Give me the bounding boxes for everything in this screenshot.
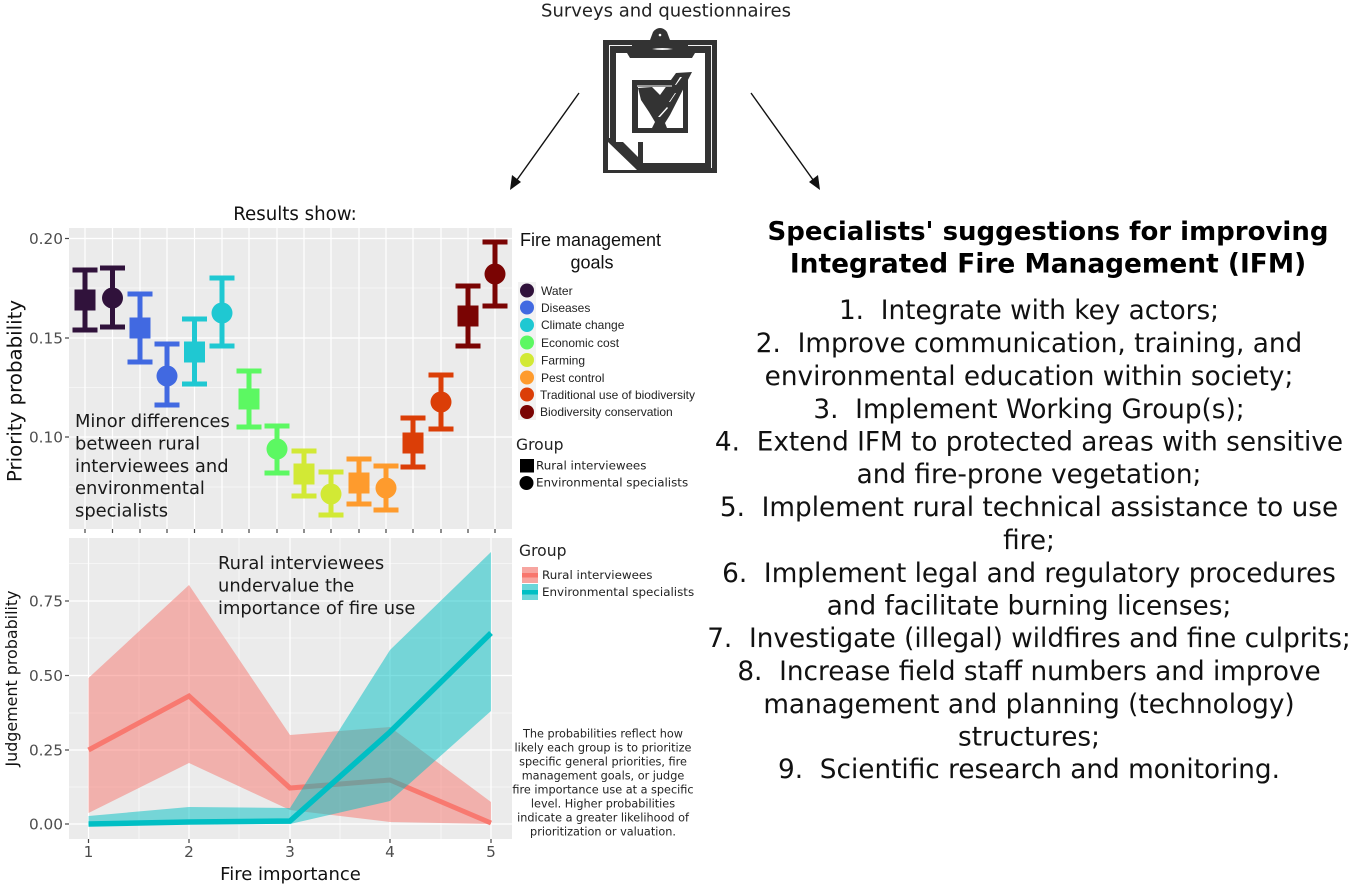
annotation: minor differences: interviewees and: [75, 456, 229, 477]
panel: judgement probability chart: 0.00: [29, 816, 63, 834]
list: nine suggestions: 2. Improve communication, training, and: [756, 329, 1302, 359]
panel: priority probability chart: 0.10: [29, 428, 63, 446]
panel: judgement probability chart: Judgement probability: [2, 590, 21, 768]
text block: probability note: The probabilities reflect how: [522, 728, 683, 740]
list: nine suggestions: 5. Implement rural technical assistance to use: [720, 493, 1338, 523]
annotation: rural interviewees undervalue: importance of fire use: [218, 598, 415, 619]
legend: fire management goals: [518, 230, 695, 420]
series: rural interviewees ribbon and line: [88, 585, 491, 824]
list: nine suggestions: 1. Integrate with key actors;: [839, 296, 1219, 326]
data: water: [72, 268, 125, 330]
annotation: minor differences: environmental: [75, 478, 205, 499]
text block: probability note: level. Higher probabilities: [531, 798, 675, 810]
list: nine suggestions: and fire-prone vegetation;: [857, 460, 1201, 490]
legend: fire management goals: Water: [541, 284, 573, 298]
text block: probability note: management goals, or judge: [522, 770, 684, 782]
heading: specialists' suggestions: Integrated Fire Management (IFM): [790, 248, 1306, 280]
legend: fire management goals: Biodiversity conservation: [540, 405, 673, 419]
legend: fire management goals: Diseases: [541, 301, 590, 315]
panel: priority probability chart: 0.15: [29, 330, 63, 348]
panel: judgement probability chart: 0.75: [29, 592, 63, 610]
legend: group shapes: Environmental specialists: [536, 476, 688, 490]
heading: results show: Results show:: [233, 204, 357, 225]
annotation: minor differences: specialists: [75, 500, 168, 522]
data: diseases: [128, 294, 180, 405]
panel: judgement probability chart: 4: [385, 843, 395, 861]
heading: specialists' suggestions: [768, 217, 1328, 280]
list: nine suggestions: fire;: [1003, 526, 1055, 556]
panel: priority probability chart: Priority probability: [4, 300, 26, 482]
list: nine suggestions: 3. Implement Working Group(s);: [813, 395, 1245, 425]
panel: judgement probability chart: 5: [486, 843, 496, 861]
legend: fire management goals: Economic cost: [541, 336, 620, 350]
arrow: to results: [510, 93, 579, 190]
legend: group ribbons: Rural interviewees: [542, 568, 652, 582]
legend: fire management goals: goals: [570, 252, 614, 272]
list: nine suggestions: management and planning (technology): [763, 690, 1295, 720]
data: farming: [292, 451, 344, 515]
legend: group shapes: Group: [516, 436, 564, 454]
panel: judgement probability chart: Fire importance: [220, 864, 361, 885]
legend: fire management goals: Fire management: [520, 230, 661, 250]
arrow: to suggestions: [751, 93, 820, 190]
list: nine suggestions: 8. Increase field staff numbers and improve: [737, 657, 1321, 687]
legend: fire management goals: Traditional use of biodiversity: [540, 388, 695, 402]
panel: judgement probability chart: 0.25: [29, 742, 63, 760]
data: climate change: [182, 278, 234, 384]
text block: probability note: [512, 728, 694, 838]
data: traditional use of biodiversity: [400, 375, 454, 467]
data: pest control: [346, 459, 398, 510]
list: nine suggestions: 9. Scientific research and monitoring.: [778, 755, 1280, 785]
legend: group shapes: Rural interviewees: [536, 458, 646, 472]
list: nine suggestions: and facilitate burning licenses;: [827, 592, 1231, 622]
panel: judgement probability chart: [2, 538, 512, 885]
legend: group shapes: [516, 436, 688, 490]
series: environmental specialists ribbon and line: [88, 552, 491, 824]
list: nine suggestions: structures;: [958, 722, 1100, 752]
data: economic cost: [236, 371, 290, 473]
panel: judgement probability chart: 2: [184, 843, 194, 861]
panel: judgement probability chart: 0.50: [29, 667, 63, 685]
panel: priority probability chart: [4, 228, 512, 533]
list: nine suggestions: environmental education within society;: [765, 362, 1293, 392]
annotation: minor differences: Minor differences: [75, 411, 230, 432]
legend: fire management goals: Farming: [541, 354, 585, 368]
annotation: rural interviewees undervalue: [218, 553, 415, 619]
list: nine suggestions: 7. Investigate (illegal) wildfires and fine culprits;: [707, 624, 1351, 654]
annotation: rural interviewees undervalue: Rural interviewees: [218, 553, 384, 574]
text block: probability note: indicate a greater likelihood of: [517, 812, 690, 824]
text block: probability note: specific general priorities, fire: [519, 756, 687, 768]
legend: group ribbons: Group: [519, 542, 567, 560]
data: biodiversity conservation: [456, 242, 508, 346]
list: nine suggestions: 6. Implement legal and regulatory procedures: [722, 559, 1336, 589]
panel: priority probability chart: 0.20: [29, 230, 63, 248]
text block: probability note: fire importance use at a specific: [512, 784, 694, 796]
annotation: minor differences: [75, 411, 230, 522]
list: nine suggestions: 4. Extend IFM to protected areas with sensitive: [715, 428, 1343, 458]
heading: specialists' suggestions: Specialists' suggestions for improving: [768, 217, 1328, 247]
text block: probability note: likely each group is to prioritize: [515, 742, 692, 754]
panel: judgement probability chart: 1: [84, 843, 93, 861]
legend: group ribbons: [519, 542, 694, 600]
annotation: minor differences: between rural: [75, 434, 200, 454]
annotation: rural interviewees undervalue: undervalue the: [218, 576, 354, 596]
legend: fire management goals: Pest control: [541, 371, 604, 385]
text block: probability note: prioritization or valuation.: [530, 826, 676, 838]
legend: fire management goals: Climate change: [541, 318, 625, 332]
list: nine suggestions: [707, 296, 1351, 785]
panel: judgement probability chart: 3: [285, 843, 295, 861]
heading: surveys and questionnaires: Surveys and questionnaires: [541, 0, 791, 22]
legend: group ribbons: Environmental specialists: [542, 585, 694, 599]
icon: clipboard with checkmark: [603, 28, 717, 173]
